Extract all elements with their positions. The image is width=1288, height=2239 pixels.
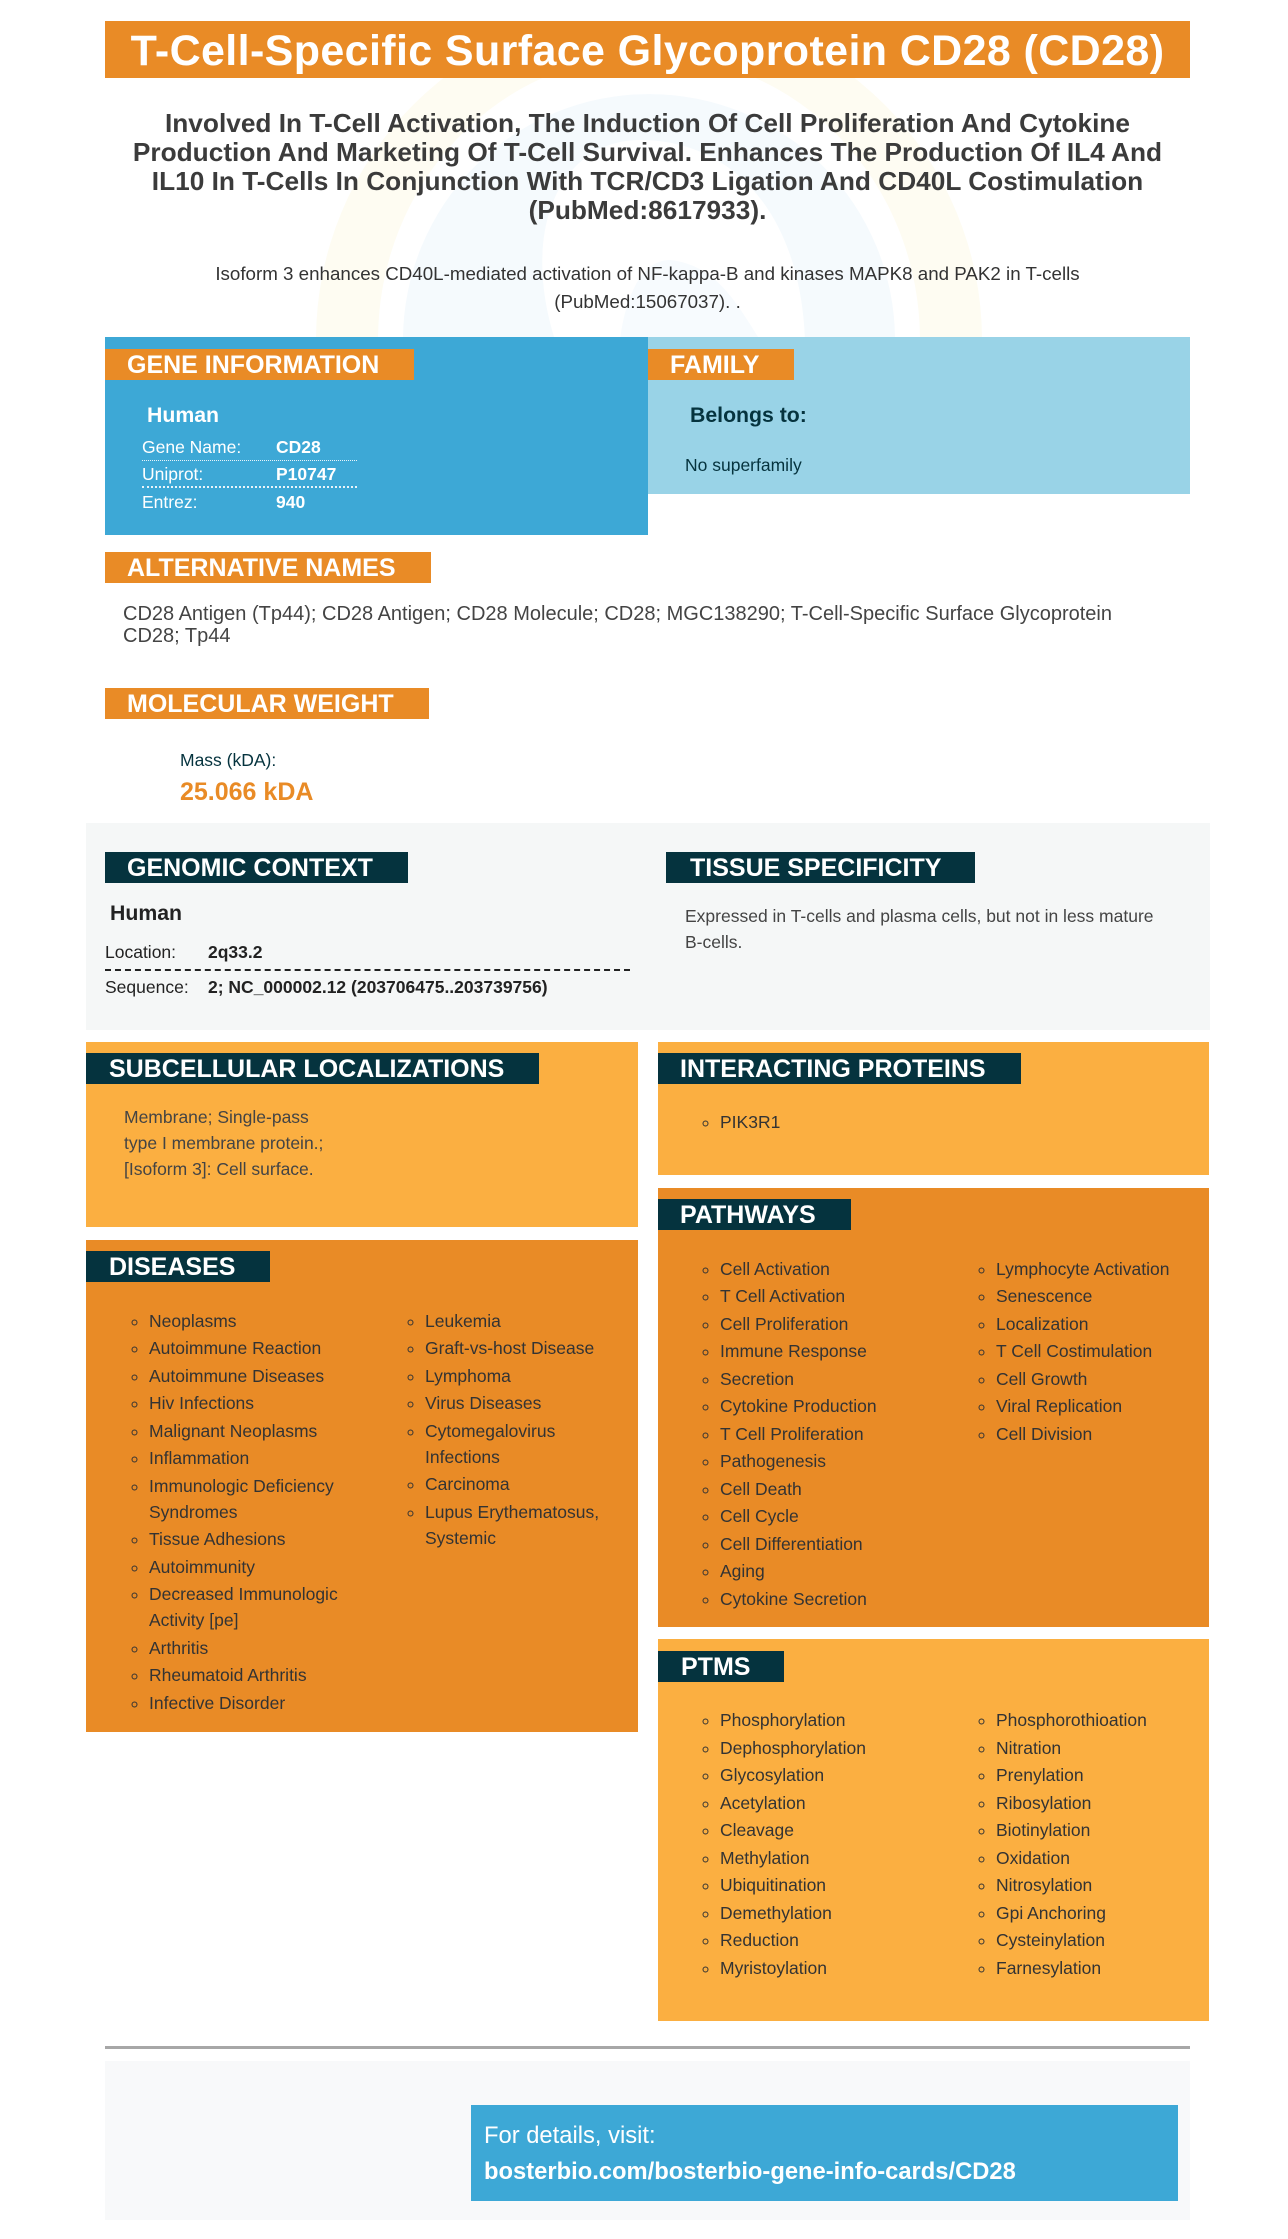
- list: diseases column 1: Hiv Infections: [149, 1393, 254, 1413]
- panel: diseases: [86, 1240, 638, 1732]
- list: diseases column 2: Graft-vs-host Disease: [425, 1338, 594, 1358]
- list: PTMs column 2: Nitrosylation: [996, 1875, 1092, 1895]
- localization text: [124, 1107, 323, 1179]
- list: diseases column 1: Activity [pe]: [149, 1610, 238, 1630]
- alternative names text: [123, 603, 1112, 647]
- list: pathways column 1: Cytokine Secretion: [720, 1588, 867, 1608]
- list: pathways column 1: T Cell Proliferation: [720, 1424, 864, 1444]
- list: pathways column 1: Secretion: [720, 1368, 794, 1388]
- heading: diseases: DISEASES: [109, 1253, 235, 1281]
- list: pathways column 2: Localization: [996, 1314, 1088, 1334]
- list: diseases column 2: Cytomegalovirus: [425, 1420, 555, 1440]
- call to action text: For details, visit:: [484, 2122, 656, 2149]
- tissue specificity text: B-cells.: [685, 932, 742, 952]
- list: interacting proteins: PIK3R1: [720, 1112, 780, 1132]
- list: pathways column 1: Cell Proliferation: [720, 1314, 848, 1334]
- heading: subcellular localizations: SUBCELLULAR LOCALIZATIONS: [109, 1055, 504, 1083]
- gene name row: [142, 432, 357, 461]
- entrez row: [142, 492, 305, 512]
- gene name row: CD28: [276, 437, 321, 457]
- list: diseases column 1: Autoimmune Diseases: [149, 1366, 324, 1386]
- list: pathways column 2: Cell Growth: [996, 1368, 1087, 1388]
- list: diseases column 1: Malignant Neoplasms: [149, 1420, 317, 1440]
- panel: molecular weight: [105, 688, 429, 806]
- list: diseases column 1: Rheumatoid Arthritis: [149, 1665, 307, 1685]
- list: diseases column 1: Neoplasms: [149, 1310, 237, 1330]
- list: pathways column 1: Immune Response: [720, 1341, 867, 1361]
- panel: gene information: [105, 337, 648, 535]
- list: diseases column 1: Infective Disorder: [149, 1692, 285, 1712]
- list: PTMs column 2: Cysteinylation: [996, 1930, 1105, 1950]
- location row: [105, 942, 262, 962]
- list: diseases column 1: [132, 1310, 338, 1712]
- localization text: [Isoform 3]: Cell surface.: [124, 1159, 314, 1179]
- list: PTMs column 1: Methylation: [720, 1848, 810, 1868]
- dashed divider: [105, 969, 630, 971]
- mass value: 25.066 kDA: [180, 778, 313, 806]
- uniprot row: [142, 459, 357, 488]
- panel: pathways: [658, 1188, 1209, 1627]
- list: pathways column 1: Cell Differentiation: [720, 1534, 863, 1554]
- list: diseases column 1: Immunologic Deficiency: [149, 1476, 334, 1496]
- list: pathways column 1: Pathogenesis: [720, 1451, 826, 1471]
- sequence row: Sequence:: [105, 977, 189, 997]
- entrez row: 940: [276, 492, 305, 512]
- heading: PTMs: PTMS: [681, 1653, 750, 1681]
- list: PTMs column 2: Biotinylation: [996, 1820, 1090, 1840]
- isoform description: (PubMed:15067037). .: [554, 291, 741, 312]
- list: PTMs column 2: Prenylation: [996, 1765, 1084, 1785]
- tissue specificity text: [685, 906, 1154, 952]
- heading: pathways: [658, 1199, 851, 1230]
- species label: Human: [147, 403, 219, 427]
- list: diseases column 1: Inflammation: [149, 1448, 249, 1468]
- list: PTMs column 1: Dephosphorylation: [720, 1738, 866, 1758]
- location row: Location:: [105, 942, 176, 962]
- uniprot row: Uniprot:: [142, 464, 203, 484]
- list: PTMs column 1: Myristoylation: [720, 1958, 827, 1978]
- alternative names text: CD28 Antigen (Tp44); CD28 Antigen; CD28 Molecule; CD28; MGC138290; T-Cell-Specific Surface Glycoprotein: [123, 603, 1112, 625]
- list: diseases column 2: Lymphoma: [425, 1366, 511, 1386]
- list: diseases column 2: Infections: [425, 1446, 500, 1466]
- family value: No superfamily: [685, 455, 802, 475]
- list: pathways column 2: Senescence: [996, 1286, 1092, 1306]
- list: PTMs column 2: Phosphorothioation: [996, 1710, 1147, 1730]
- tissue specificity text: Expressed in T-cells and plasma cells, but not in less mature: [685, 906, 1154, 926]
- panel: alternative names: [105, 552, 1112, 647]
- list: pathways column 1: Cell Activation: [720, 1258, 830, 1278]
- summary heading: Production And Marketing Of T-Cell Survival. Enhances The Production Of IL4 And: [133, 137, 1162, 167]
- list: pathways column 2: Cell Division: [996, 1424, 1092, 1444]
- list: diseases column 1: Decreased Immunologic: [149, 1584, 338, 1604]
- list: pathways column 1: T Cell Activation: [720, 1286, 845, 1306]
- list: diseases column 2: Lupus Erythematosus,: [425, 1502, 599, 1522]
- list: PTMs column 2: Farnesylation: [996, 1958, 1101, 1978]
- heading: tissue specificity: TISSUE SPECIFICITY: [690, 854, 941, 882]
- heading: pathways: PATHWAYS: [680, 1201, 816, 1229]
- summary heading: (PubMed:8617933).: [529, 195, 766, 225]
- list: pathways column 2: Viral Replication: [996, 1396, 1122, 1416]
- list: diseases column 2: Virus Diseases: [425, 1393, 541, 1413]
- panel: subcellular localizations: [86, 1042, 638, 1227]
- list: diseases column 2: Carcinoma: [425, 1474, 510, 1494]
- heading: alternative names: ALTERNATIVE NAMES: [127, 554, 396, 582]
- heading: family: [648, 349, 794, 380]
- list: pathways column 2: Lymphocyte Activation: [996, 1258, 1169, 1278]
- watermark logo: [316, 78, 982, 337]
- list: pathways column 1: Aging: [720, 1561, 765, 1581]
- panel: family: [648, 337, 1190, 494]
- list: PTMs column 2: Nitration: [996, 1738, 1061, 1758]
- list: diseases column 1: Syndromes: [149, 1502, 238, 1522]
- belongs to label: Belongs to:: [690, 403, 807, 427]
- alternative names text: CD28; Tp44: [123, 625, 230, 647]
- sequence row: 2; NC_000002.12 (203706475..203739756): [208, 977, 548, 997]
- isoform description: Isoform 3 enhances CD40L-mediated activation of NF-kappa-B and kinases MAPK8 and PAK2 in T-cells: [215, 263, 1080, 284]
- list: PTMs column 1: Phosphorylation: [720, 1710, 846, 1730]
- list: diseases column 1: Autoimmune Reaction: [149, 1338, 321, 1358]
- panel: PTMs: [658, 1639, 1209, 2021]
- list: PTMs column 1: [702, 1710, 866, 1978]
- details URL: bosterbio.com/bosterbio-gene-info-cards/CD28: [484, 2158, 1016, 2185]
- list: PTMs column 1: Glycosylation: [720, 1765, 824, 1785]
- uniprot row: P10747: [276, 464, 336, 484]
- list: pathways column 2: [978, 1258, 1169, 1444]
- heading: family: FAMILY: [670, 351, 759, 379]
- list: diseases column 2: Leukemia: [425, 1310, 501, 1330]
- summary heading: IL10 In T-Cells In Conjunction With TCR/CD3 Ligation And CD40L Costimulation: [152, 166, 1143, 196]
- list: pathways column 2: T Cell Costimulation: [996, 1341, 1152, 1361]
- list: PTMs column 1: Acetylation: [720, 1792, 806, 1812]
- mass label: Mass (kDA):: [180, 750, 276, 770]
- heading: genomic context: GENOMIC CONTEXT: [127, 854, 373, 882]
- heading: PTMs: [658, 1651, 784, 1682]
- entrez row: Entrez:: [142, 492, 197, 512]
- list: pathways column 1: Cell Cycle: [720, 1506, 799, 1526]
- list: PTMs column 1: Reduction: [720, 1930, 799, 1950]
- panel: genomic context and tissue specificity: 2q33.2: [208, 942, 262, 962]
- list: diseases column 2: Systemic: [425, 1528, 496, 1548]
- list: PTMs column 2: Ribosylation: [996, 1792, 1091, 1812]
- heading: gene information: GENE INFORMATION: [127, 351, 379, 379]
- list: diseases column 2: [408, 1310, 599, 1548]
- title banner: T-Cell-Specific Surface Glycoprotein CD28 (CD28): [131, 27, 1164, 75]
- list: diseases column 1: Autoimmunity: [149, 1556, 255, 1576]
- callout: details link: [471, 2105, 1178, 2201]
- localization text: Membrane; Single-pass: [124, 1107, 309, 1127]
- list: PTMs column 2: Gpi Anchoring: [996, 1902, 1106, 1922]
- panel: footer: [105, 2061, 1190, 2220]
- panel: interacting proteins: [658, 1042, 1209, 1175]
- list: diseases column 1: Tissue Adhesions: [149, 1529, 286, 1549]
- list: pathways column 1: [702, 1258, 877, 1608]
- heading: interacting proteins: INTERACTING PROTEINS: [680, 1055, 986, 1083]
- summary heading: Involved In T-Cell Activation, The Induction Of Cell Proliferation And Cytokine: [165, 108, 1130, 138]
- species label: Human: [110, 901, 182, 925]
- list: PTMs column 2: [978, 1710, 1147, 1978]
- summary heading: [133, 108, 1162, 225]
- list: diseases column 1: Arthritis: [149, 1638, 208, 1658]
- list: PTMs column 1: Demethylation: [720, 1902, 832, 1922]
- panel: genomic context and tissue specificity: [86, 823, 1210, 1030]
- list: PTMs column 1: Cleavage: [720, 1820, 794, 1840]
- list: PTMs column 2: Oxidation: [996, 1848, 1070, 1868]
- list: PTMs column 1: Ubiquitination: [720, 1875, 826, 1895]
- isoform description: [215, 263, 1080, 312]
- heading: molecular weight: MOLECULAR WEIGHT: [127, 690, 394, 718]
- list: pathways column 1: Cell Death: [720, 1478, 802, 1498]
- localization text: type I membrane protein.;: [124, 1133, 323, 1153]
- heading: diseases: [86, 1251, 270, 1282]
- list: pathways column 1: Cytokine Production: [720, 1396, 877, 1416]
- gene name row: Gene Name:: [142, 437, 241, 457]
